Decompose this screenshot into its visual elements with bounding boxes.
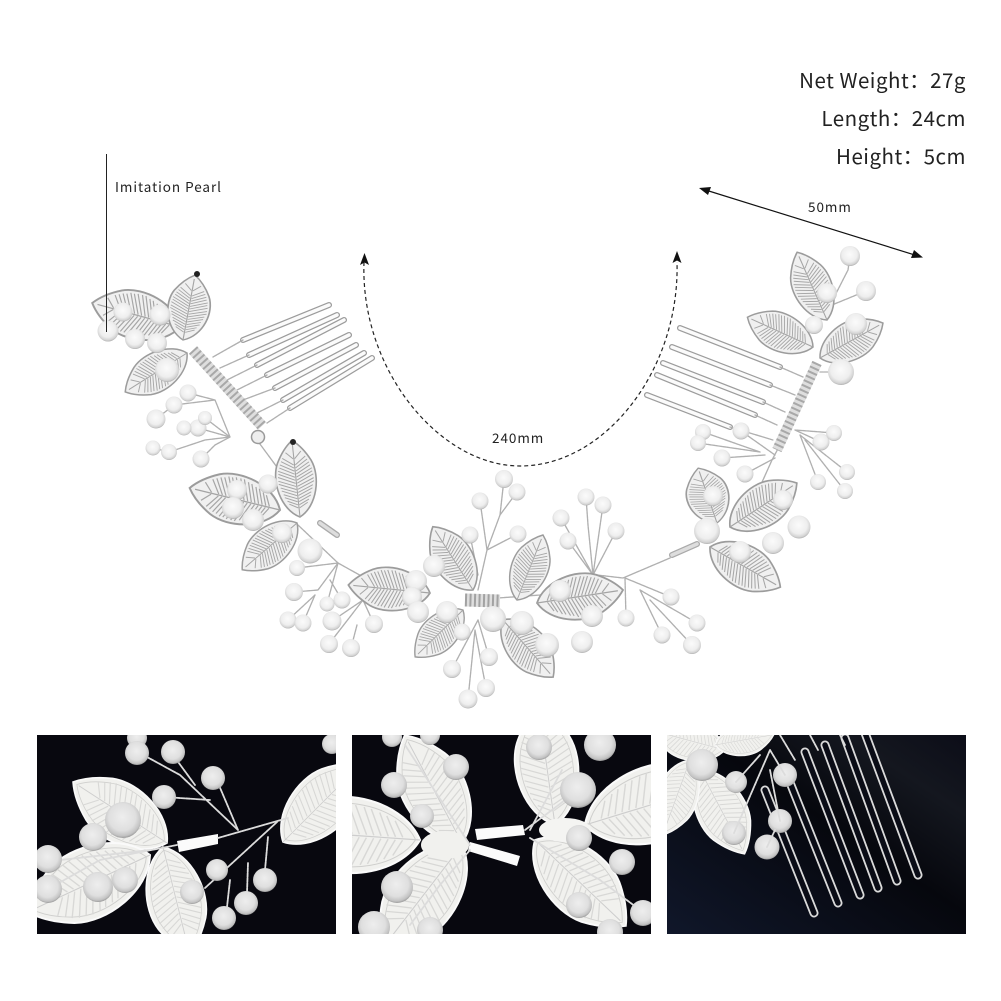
- panel 3 comb tines: [765, 733, 918, 913]
- leaves: center cluster: [346, 516, 626, 690]
- specs text block: [799, 64, 966, 170]
- product: hair vine: [86, 244, 892, 709]
- right comb: [647, 328, 817, 450]
- panel 2 clips: [468, 825, 525, 866]
- photo panel: clips detail: [352, 735, 651, 934]
- panel 3 leaves: [643, 712, 777, 866]
- center wire wrap: [465, 600, 500, 601]
- left comb curl: [252, 430, 264, 444]
- panel 2 pearls: [358, 725, 656, 945]
- leaves: lower right cluster: [672, 461, 808, 606]
- right comb spine: [777, 363, 817, 450]
- left comb tines: [213, 305, 372, 423]
- left comb spine: [193, 350, 262, 426]
- right comb tines: [647, 328, 803, 440]
- dimension arrow: 240mm curve: 240mm: [492, 427, 544, 447]
- panel 1 wires: [48, 755, 288, 907]
- main wires: [153, 256, 866, 699]
- metal clip left: [320, 523, 337, 535]
- dimension arrow: 240mm curve: [360, 251, 682, 466]
- leaves: upper left cluster: [86, 271, 216, 408]
- leaves: upper right cluster: [740, 244, 892, 375]
- photo panel: leaves and pearls detail: [37, 735, 336, 934]
- pearls: [98, 246, 876, 708]
- panel 2 leaves: [273, 702, 735, 969]
- left comb: [193, 305, 372, 444]
- panel 3 wires: [734, 735, 845, 847]
- panel 3 pearls: [686, 749, 797, 860]
- height: Height：5cm: [836, 140, 966, 170]
- photo panel: comb detail: [667, 735, 966, 934]
- net weight: Net Weight：27g: [799, 64, 966, 94]
- panel 1 pearls: [34, 728, 342, 930]
- leaves: lower left cluster: [184, 438, 337, 584]
- panel 1 clip: [177, 834, 218, 852]
- dimension arrow: 50mm: 50mm: [808, 196, 852, 216]
- panel 1 leaves: [13, 744, 381, 961]
- callout: imitation pearl: Imitation Pearl: [115, 176, 222, 196]
- panel 2 wires: [405, 745, 640, 925]
- metal clip right: [672, 544, 697, 555]
- length: Length：24cm: [821, 102, 966, 132]
- dimension arrow: 50mm: [699, 187, 923, 258]
